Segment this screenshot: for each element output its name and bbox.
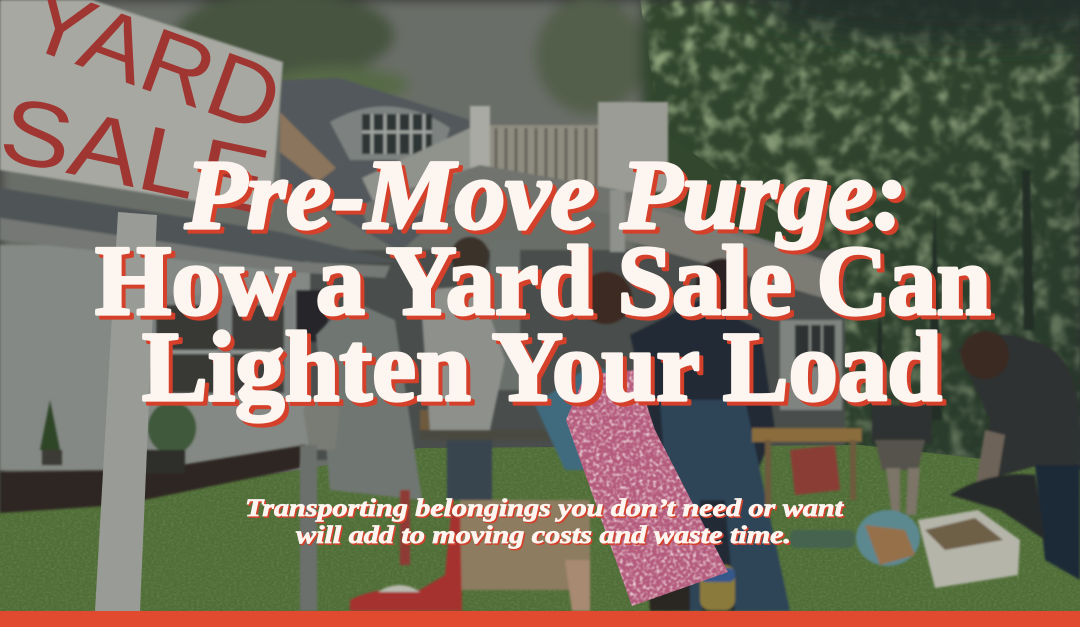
subtitle line 1: Transporting belongings you don’t need or want xyxy=(245,495,844,522)
subtitle xyxy=(245,495,846,550)
title line 2 shadow: How a Yard Sale Can xyxy=(99,229,995,340)
child's legs xyxy=(565,540,690,611)
subtitle line 2 shadow: will add to moving costs and waste time. xyxy=(298,524,792,550)
cardboard box xyxy=(918,510,1020,588)
potted shrubs xyxy=(40,400,196,474)
child's pink dress xyxy=(566,370,728,606)
house xyxy=(0,78,845,470)
orange bottom band xyxy=(0,611,1080,627)
subtitle line 2: will add to moving costs and waste time. xyxy=(296,522,791,549)
red tricycle xyxy=(350,490,462,611)
subtitle line 1 shadow: Transporting belongings you don’t need or want xyxy=(246,496,846,524)
title line 3: Lighten Your Load xyxy=(142,311,942,422)
lawn xyxy=(0,445,1080,611)
title xyxy=(95,139,995,426)
title line 3 shadow: Lighten Your Load xyxy=(146,315,946,426)
title line 1 shadow: Pre-Move Purge: xyxy=(188,143,911,254)
sign post xyxy=(95,212,157,611)
foliage xyxy=(640,0,1080,480)
title line 1: Pre-Move Purge: xyxy=(184,139,907,250)
title line 2: How a Yard Sale Can xyxy=(95,225,991,336)
tan box on lawn xyxy=(460,500,590,590)
house windows xyxy=(148,290,328,395)
yard sale sign xyxy=(0,0,294,611)
people and sale items xyxy=(300,237,1080,611)
